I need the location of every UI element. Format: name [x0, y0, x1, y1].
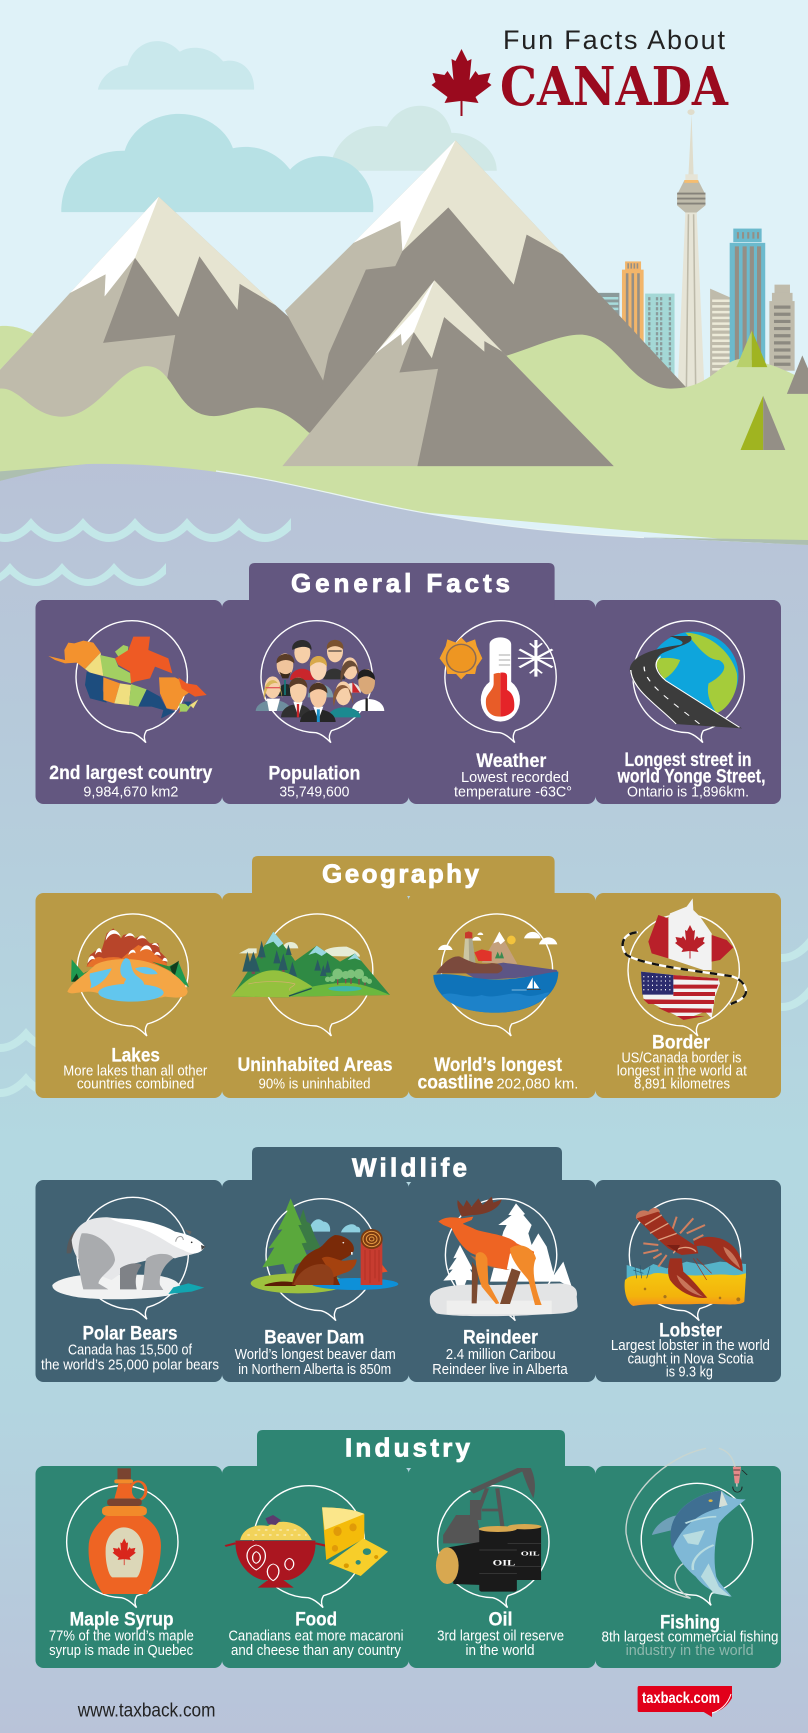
speech bubble and oil barrels with pump [436, 1453, 549, 1608]
website url: www.taxback.com [77, 1701, 215, 1722]
icon: wilderness [231, 932, 390, 997]
card: fishing [596, 1448, 781, 1668]
card description: 35,749,600 [279, 785, 349, 801]
card background [36, 1466, 222, 1668]
section: wildlife [36, 1147, 781, 1382]
card: lakes [36, 893, 222, 1098]
speech bubble [445, 1199, 557, 1321]
icon: lakes [67, 928, 189, 1002]
card background [596, 1180, 781, 1382]
cloud: small top [98, 41, 254, 90]
card: food [222, 1466, 409, 1668]
card description: Canada has 15,500 of [68, 1343, 193, 1359]
card background [36, 893, 222, 1098]
card description: in the world [466, 1643, 534, 1659]
icon: polar bear [52, 1217, 206, 1299]
card background [408, 1180, 596, 1382]
card description: 9,984,670 km2 [83, 785, 178, 801]
card description: caught in Nova Scotia [628, 1351, 754, 1367]
heading tab: industry: Industry [345, 1433, 471, 1463]
speech bubble and weather icons [440, 621, 556, 743]
card background [222, 1466, 409, 1668]
building: aqua [645, 294, 675, 379]
card description: and cheese than any country [231, 1643, 402, 1659]
speech bubble and syrup bottle [67, 1468, 178, 1608]
speech bubble and macaroni and cheese [225, 1486, 388, 1608]
card description: 77% of the world’s maple [49, 1628, 194, 1644]
card: population [222, 600, 409, 804]
hero illustration [0, 0, 808, 560]
heading tab: wildlife [252, 1147, 562, 1183]
heading tab: wildlife: Wildlife [352, 1153, 467, 1183]
building: striped white [710, 289, 734, 379]
card description: 202,080 km. [496, 1077, 578, 1093]
speech bubble [441, 914, 553, 1036]
card: polar bears [36, 1180, 222, 1382]
heading tab: geography [252, 856, 555, 896]
card description: temperature -63C° [454, 785, 572, 801]
speech bubble and globe with road [630, 621, 744, 743]
card title [617, 750, 766, 788]
speech bubble [628, 914, 739, 1036]
card description [235, 1347, 396, 1378]
shoreline shadows [0, 464, 808, 545]
lake shore highlight [216, 471, 644, 538]
CN tower [677, 109, 705, 389]
card title: World’s longest [434, 1055, 563, 1076]
card description [617, 1051, 747, 1093]
icon: maple leaf [432, 49, 492, 116]
card description: Reindeer live in Alberta [432, 1362, 569, 1378]
speech bubble [262, 914, 373, 1036]
card title: Longest street in [624, 750, 752, 771]
rolling green hills [0, 326, 808, 546]
speech bubble [77, 1197, 188, 1319]
card background [222, 600, 409, 804]
card title: Border [652, 1033, 711, 1054]
card description [432, 1347, 569, 1378]
building: blue [730, 229, 765, 362]
lake water [0, 464, 808, 561]
cloud: behind mountain [330, 106, 497, 171]
card title: Lobster [659, 1320, 723, 1341]
card description [63, 1064, 207, 1093]
card description: Ontario is 1,896km. [627, 785, 749, 801]
card description: World’s longest beaver dam [235, 1347, 396, 1363]
left mountain [0, 197, 361, 446]
heading tab: geography: Geography [322, 859, 480, 889]
icon: canada map [48, 637, 207, 718]
building: teal left [598, 293, 619, 321]
card description [228, 1628, 404, 1659]
card description: Largest lobster in the world [611, 1338, 770, 1354]
card: maple syrup [36, 1466, 222, 1668]
card description: 90% is uninhabited [258, 1077, 370, 1093]
card background [408, 1466, 596, 1668]
icon: beaver [251, 1198, 398, 1293]
icon: people group [256, 640, 384, 722]
section: industry [36, 1430, 781, 1668]
wave: upper lake [0, 518, 291, 542]
heading tab: industry [257, 1430, 565, 1468]
card: weather [408, 600, 596, 804]
city skyline [598, 109, 795, 389]
card background [596, 600, 781, 804]
card description: 3rd largest oil reserve [437, 1628, 564, 1644]
card description: in Northern Alberta is 850m [238, 1362, 391, 1378]
building: grey [769, 285, 795, 371]
taxback logo: taxback.com [642, 1690, 720, 1707]
card background [36, 600, 222, 804]
speech bubble [629, 1199, 741, 1321]
waves: side decorations [0, 938, 808, 1097]
card title: Lakes [111, 1045, 160, 1066]
card description [602, 1630, 778, 1659]
speech bubble [261, 621, 372, 743]
card title: Oil [488, 1610, 512, 1631]
card: beaver dam [222, 1180, 409, 1382]
speech bubble and oil barrels with pump: OIL [521, 1550, 540, 1557]
front mountain [282, 280, 614, 466]
title block [432, 25, 729, 118]
card background [596, 1466, 781, 1668]
card description: 8th largest commercial fishing [602, 1630, 778, 1646]
card description [418, 1073, 578, 1094]
card title: Food [295, 1610, 337, 1631]
card title: Reindeer [463, 1328, 539, 1349]
card title: Population [268, 763, 360, 784]
speech bubble [266, 1199, 377, 1321]
card background [222, 893, 409, 1098]
card description [41, 1343, 219, 1373]
taxback logo [638, 1686, 732, 1717]
card title: world Yonge Street, [617, 767, 766, 788]
card description: Canadians eat more macaroni [228, 1628, 404, 1644]
card description [454, 770, 572, 801]
card background [596, 893, 781, 1098]
card: 2nd largest country [36, 600, 222, 804]
card description: the world’s 25,000 polar bears [41, 1357, 219, 1373]
card title: Uninhabited Areas [238, 1055, 392, 1076]
cloud: large [61, 114, 373, 212]
card description: More lakes than all other [63, 1064, 207, 1080]
speech bubble and oil barrels with pump: OIL [493, 1559, 515, 1568]
card title: Polar Bears [82, 1323, 178, 1344]
building: orange [622, 261, 644, 345]
card description [611, 1338, 770, 1381]
card description: 8,891 kilometres [634, 1077, 730, 1093]
card: reindeer [408, 1180, 596, 1382]
card: uninhabited areas [222, 893, 409, 1098]
card background [222, 1180, 409, 1382]
card: oil [408, 1453, 596, 1668]
card title: Fishing [660, 1612, 720, 1633]
card description: syrup is made in Quebec [49, 1643, 193, 1659]
card: border [596, 893, 781, 1098]
card: longest street [596, 600, 781, 804]
card description: is 9.3 kg [666, 1365, 713, 1381]
heading tab: general facts: General Facts [291, 568, 510, 598]
card description: US/Canada border is [622, 1051, 742, 1067]
card title: 2nd largest country [49, 763, 213, 784]
card description: 2.4 million Caribou [446, 1347, 556, 1363]
icon: coastline [433, 931, 558, 1013]
icon: reindeer [430, 1197, 578, 1316]
card description: longest in the world at [617, 1063, 747, 1079]
card description [437, 1628, 564, 1659]
icon: border flags [623, 898, 746, 1020]
card description: industry in the world [626, 1643, 754, 1659]
card description: Lowest recorded [461, 770, 569, 786]
title line: canada: CANADA [500, 56, 729, 118]
pine trees on hill [736, 330, 808, 450]
card title: Weather [476, 751, 547, 772]
speech bubble and fish [626, 1448, 753, 1605]
wave: lower lake [0, 563, 166, 586]
card: lobster [596, 1180, 781, 1382]
card background [408, 893, 596, 1098]
card description: countries combined [77, 1077, 194, 1093]
speech bubble [76, 621, 187, 743]
heading tab: general facts [249, 563, 555, 608]
card description: coastline [418, 1073, 494, 1094]
speech bubble [77, 914, 188, 1036]
sky [0, 0, 808, 560]
icon: lobster [625, 1208, 746, 1306]
section: general facts [36, 563, 781, 804]
card title: Beaver Dam [264, 1328, 364, 1349]
section: geography [36, 856, 781, 1098]
card description [49, 1628, 194, 1659]
title line: fun facts about: Fun Facts About [503, 25, 725, 55]
centre mountain [285, 140, 691, 446]
card background [36, 1180, 222, 1382]
card: coastline [408, 893, 596, 1098]
card title: Maple Syrup [70, 1610, 174, 1631]
card background [408, 600, 596, 804]
